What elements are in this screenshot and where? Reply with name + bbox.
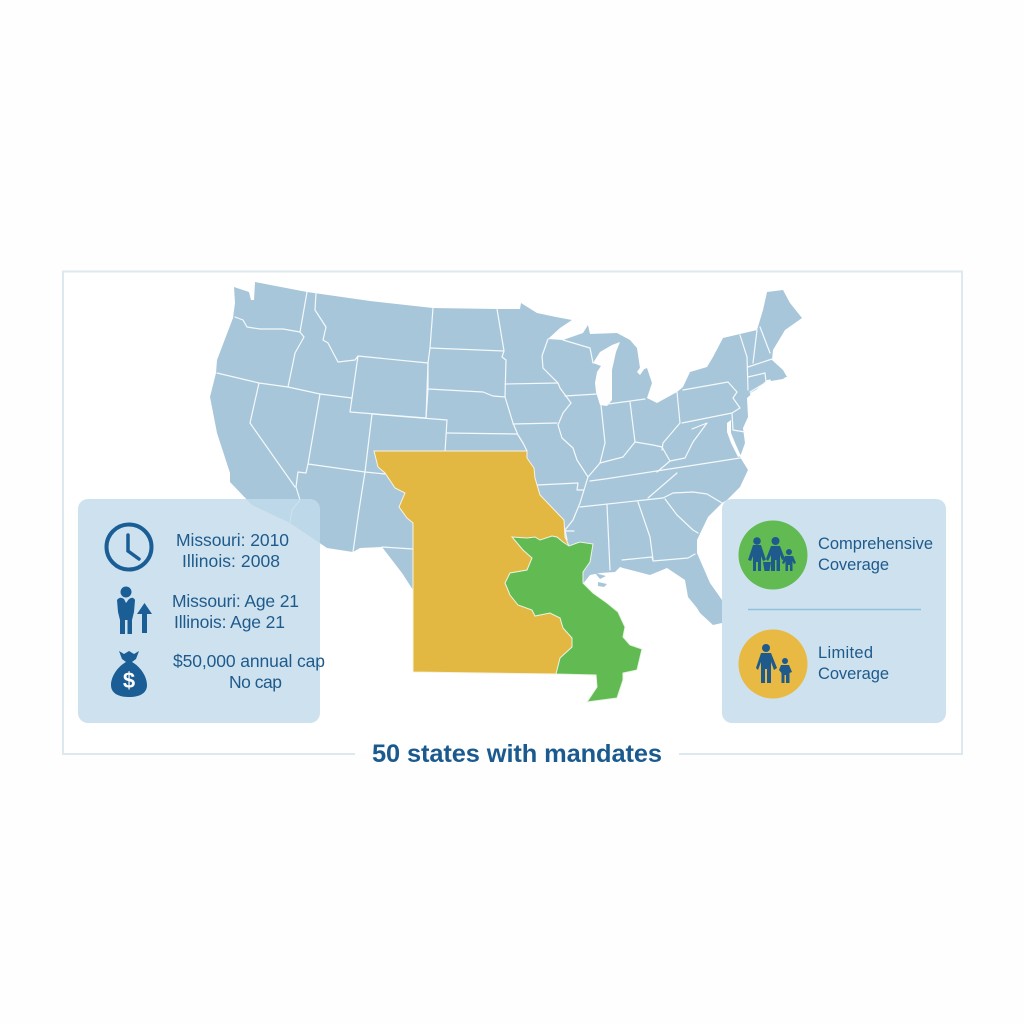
left info panel [78, 499, 325, 723]
comprehensive coverage text: Coverage [818, 556, 889, 574]
age limit text [172, 591, 299, 632]
title: 50 states with mandates [372, 740, 662, 768]
cap text: No cap [229, 672, 282, 692]
land mass [210, 282, 802, 640]
highlight: Illinois [505, 536, 642, 702]
limited coverage text: Limited [818, 644, 873, 662]
state borders [217, 292, 772, 570]
timeline text [176, 530, 289, 571]
icon: money bag [111, 651, 147, 697]
panel background [722, 499, 946, 723]
timeline text: Missouri: 2010 [176, 530, 289, 550]
age limit text: Illinois: Age 21 [174, 612, 285, 632]
limited coverage text [818, 644, 889, 683]
islands [595, 376, 787, 587]
timeline text: Illinois: 2008 [182, 551, 280, 571]
icon: comprehensive coverage family [738, 520, 808, 590]
age limit text: Missouri: Age 21 [172, 591, 299, 611]
divider [748, 608, 921, 610]
cap text [173, 651, 325, 692]
icon: money bag: $ [123, 668, 135, 693]
panel background [78, 499, 320, 723]
icon: person with upward arrow [117, 586, 152, 634]
map: United States [210, 282, 802, 640]
great lakes [548, 316, 645, 406]
highlight: Missouri [374, 451, 600, 674]
right legend panel [722, 499, 946, 723]
chesapeake bay and coast cuts [727, 384, 767, 457]
comprehensive coverage text: Comprehensive [818, 535, 933, 553]
comprehensive coverage text [818, 535, 933, 574]
frame [63, 272, 962, 754]
cap text: $50,000 annual cap [173, 651, 325, 671]
icon: limited coverage family [738, 630, 808, 698]
icon: clock [106, 524, 152, 570]
limited coverage text: Coverage [818, 665, 889, 683]
